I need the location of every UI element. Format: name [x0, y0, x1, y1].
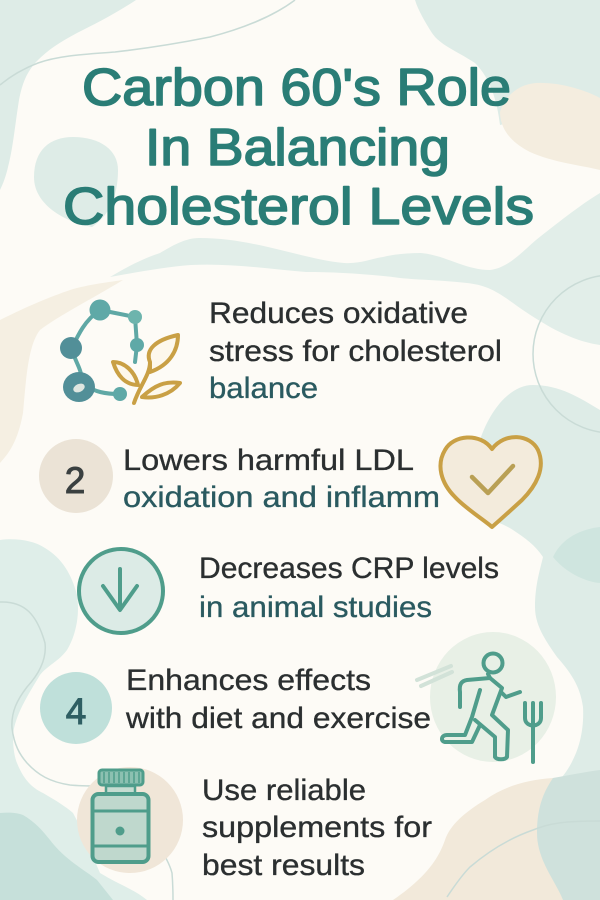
text: item 3: in animal studies [199, 591, 432, 624]
icon: down arrow circle [79, 549, 163, 633]
badge: number 4: 4 [66, 691, 86, 732]
badge: number 2: 2 [65, 460, 85, 501]
text: item 4: Enhances effects [126, 664, 371, 697]
item 4: enhances effects [40, 632, 556, 762]
text: item 2: oxidation and inflamm [123, 481, 440, 514]
text: item 3: Decreases CRP levels [199, 552, 499, 585]
text: item 1: Reduces oxidative [209, 297, 468, 330]
icon: molecule and leaf [60, 300, 180, 403]
title: In Balancing [145, 119, 450, 177]
text: item 5 [202, 774, 432, 882]
text: item 1 [209, 297, 502, 405]
text: item 3 [199, 552, 499, 624]
text: item 1: balance [209, 372, 318, 405]
item 3: decreases CRP levels [79, 549, 499, 633]
icon: supplement bottle [77, 767, 183, 873]
title: Cholesterol Levels [63, 178, 534, 236]
item 1: reduces oxidative stress [60, 297, 502, 405]
badge: number 4 [40, 672, 112, 744]
icon: runner and fork [417, 632, 556, 762]
text: item 1: stress for cholesterol [209, 335, 502, 368]
badge: number 2 [39, 439, 113, 513]
text: item 2: Lowers harmful LDL [123, 444, 414, 477]
text: item 2 [123, 444, 440, 514]
text: item 5: best results [202, 849, 365, 882]
text: item 5: supplements for [202, 811, 432, 844]
text: item 5: Use reliable [202, 774, 366, 807]
title [63, 59, 534, 236]
item 2: lowers harmful LDL [39, 437, 541, 527]
text: item 4 [125, 664, 431, 735]
item 5: use reliable supplements [77, 767, 432, 882]
icon: heart with check [440, 437, 541, 527]
text: item 4: with diet and exercise [125, 702, 431, 735]
title: Carbon 60's Role [82, 59, 511, 117]
